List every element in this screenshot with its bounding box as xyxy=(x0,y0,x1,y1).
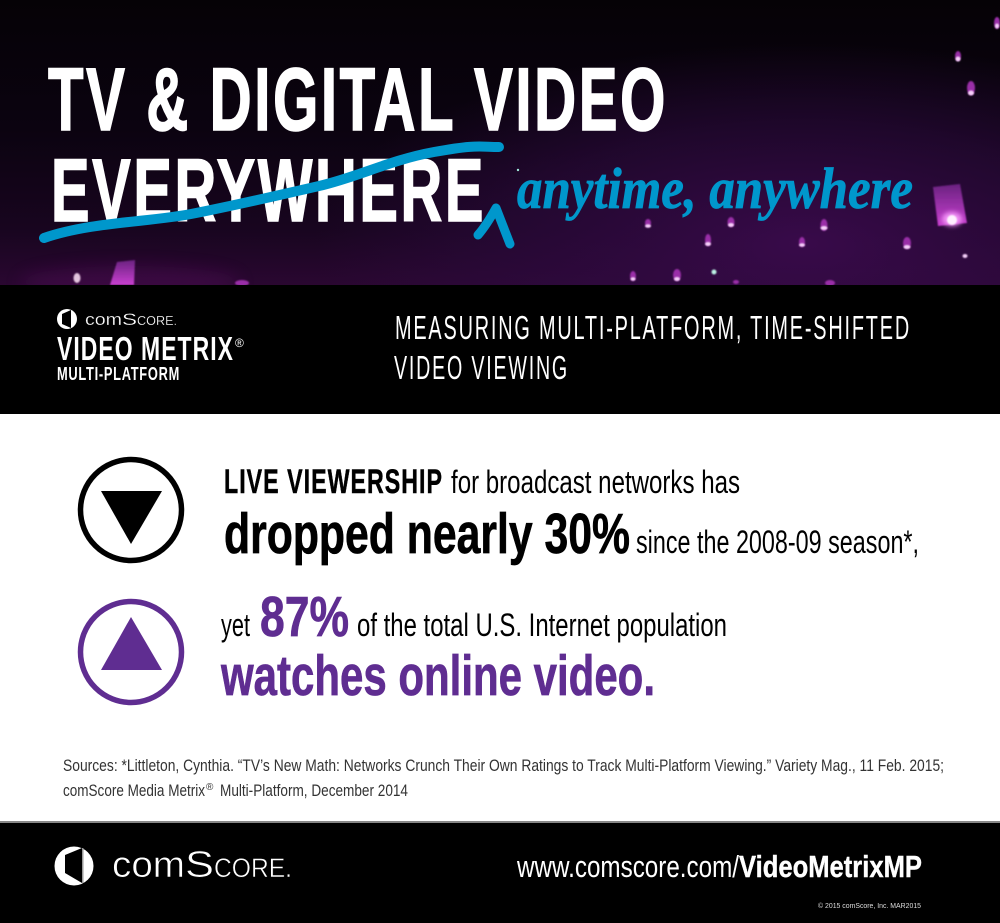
live viewership statement: LIVE VIEWERSHIP xyxy=(224,463,443,501)
online video statement: 87% xyxy=(260,585,349,649)
footer bar xyxy=(0,822,1000,923)
white panel xyxy=(0,414,1000,822)
small comScore logo mark xyxy=(57,309,77,329)
live viewership statement: dropped nearly 30% xyxy=(224,502,630,566)
lantern left xyxy=(110,260,135,285)
product logo: comScore Video Metrix Multi-Platform: CORE. xyxy=(137,313,177,328)
icon: up triangle in circle xyxy=(80,602,182,702)
caret insert mark xyxy=(478,208,510,244)
footer URL: VideoMetrixMP xyxy=(739,849,922,884)
hero photo background: night sky with lanterns xyxy=(0,0,1000,298)
black band xyxy=(0,285,1000,414)
footer comScore logo: S xyxy=(185,844,214,885)
product logo: comScore Video Metrix Multi-Platform: ® xyxy=(235,336,244,350)
handwritten tagline: anytime, anywhere xyxy=(517,156,913,221)
footer URL: www.comscore.com/ xyxy=(516,849,739,884)
band heading: VIDEO VIEWING xyxy=(394,349,569,386)
footer comScore logo: CORE. xyxy=(214,853,292,883)
lantern right xyxy=(933,184,967,226)
product logo: comScore Video Metrix Multi-Platform xyxy=(57,309,244,384)
sources xyxy=(63,757,944,800)
title xyxy=(48,49,668,240)
icon: down triangle in circle xyxy=(80,460,182,560)
live viewership statement xyxy=(224,463,919,566)
online video statement: watches online video. xyxy=(220,644,655,708)
strike-through brush stroke xyxy=(44,146,499,238)
product logo: comScore Video Metrix Multi-Platform: S xyxy=(122,310,137,329)
online video statement: of the total U.S. Internet population xyxy=(357,607,727,643)
band heading xyxy=(394,309,911,386)
live viewership statement: for broadcast networks has xyxy=(451,464,740,500)
product logo: comScore Video Metrix Multi-Platform: MULTI-PLATFORM xyxy=(57,364,180,384)
footer comScore logo xyxy=(54,844,292,886)
title: EVERYWHERE xyxy=(51,140,486,240)
product logo: comScore Video Metrix Multi-Platform: VIDEO METRIX xyxy=(57,330,234,367)
logo mark xyxy=(54,846,94,886)
copyright: © 2015 comScore, Inc. MAR2015 xyxy=(818,902,921,910)
sources: comScore Media Metrix xyxy=(63,782,206,800)
sources: Multi-Platform, December 2014 xyxy=(220,782,408,800)
sources: ® xyxy=(206,782,214,793)
title: TV & DIGITAL VIDEO xyxy=(48,49,668,149)
online video statement: yet xyxy=(221,607,250,643)
footer comScore logo: com xyxy=(112,844,185,885)
product logo: comScore Video Metrix Multi-Platform: com xyxy=(85,310,122,329)
online video statement xyxy=(220,585,727,708)
